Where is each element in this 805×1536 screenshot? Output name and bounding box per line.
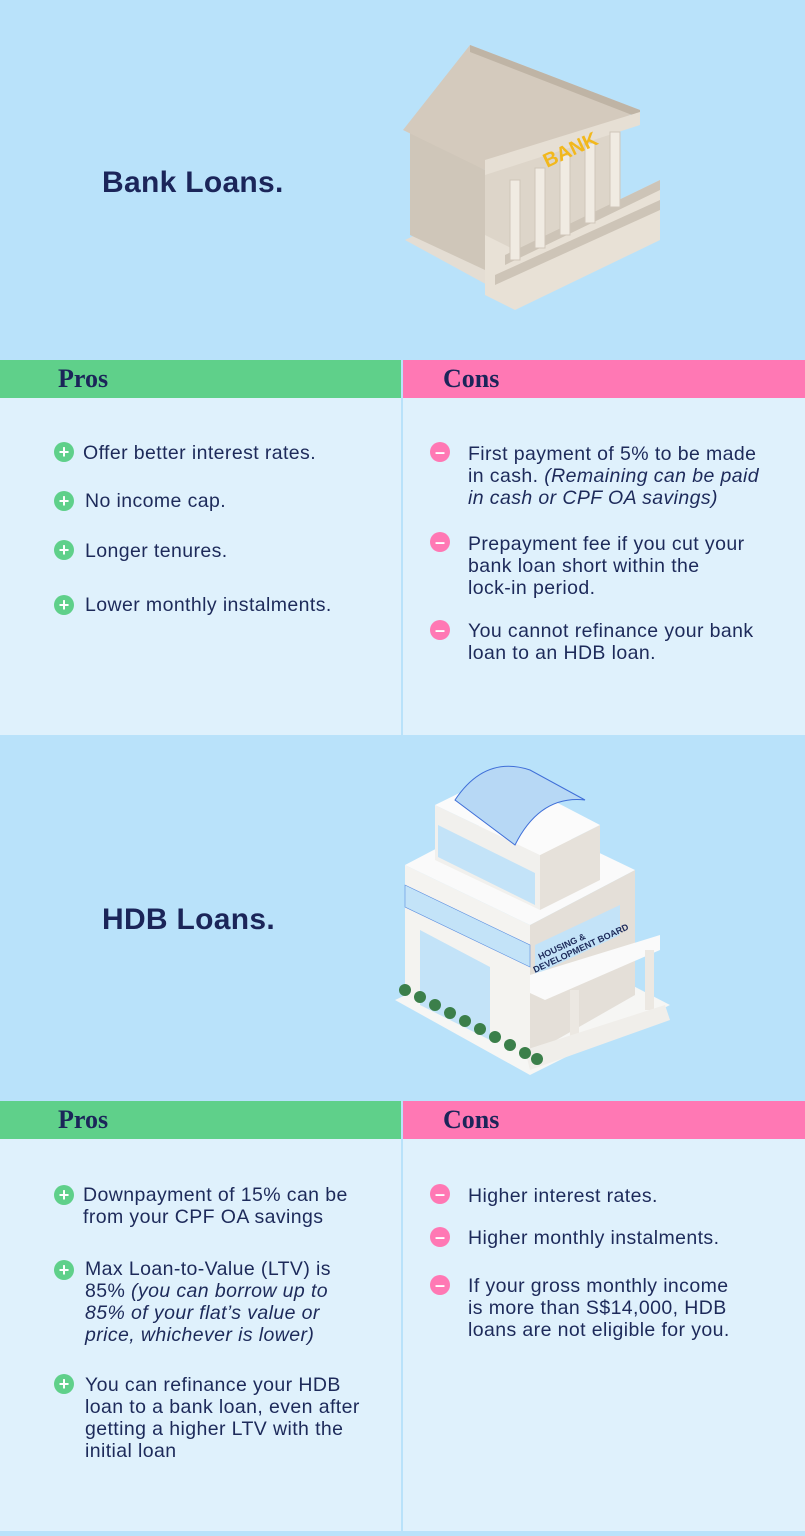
icon: bank building bbox=[403, 45, 660, 310]
panel: bank cons: First payment of 5% to be made bbox=[468, 443, 756, 465]
panel: bank cons: bank loan short within the bbox=[468, 555, 700, 577]
title: HDB Loans: HDB Loans. bbox=[102, 903, 275, 936]
panel: HDB cons: If your gross monthly income bbox=[468, 1275, 728, 1297]
panel: bank cons: in cash. (Remaining can be paid bbox=[468, 465, 759, 487]
panel: HDB pros bbox=[0, 1139, 401, 1531]
header bar: bank pros bbox=[0, 360, 401, 398]
icon: HDB building bbox=[395, 766, 670, 1075]
hero: bank loans bbox=[0, 0, 805, 360]
panel: bank pros: No income cap. bbox=[85, 490, 226, 512]
panel: bank pros: + bbox=[59, 442, 69, 462]
header bar: HDB pros bbox=[0, 1101, 401, 1139]
panel: bank cons: in cash or CPF OA savings) bbox=[468, 487, 718, 509]
panel: HDB pros: + bbox=[59, 1374, 69, 1394]
panel: HDB pros: + bbox=[59, 1260, 69, 1280]
panel: HDB pros: 85% of your flat’s value or bbox=[85, 1302, 320, 1324]
icon: bank building: BANK bbox=[540, 128, 602, 173]
panel: HDB pros: + bbox=[59, 1185, 69, 1205]
panel: HDB cons: – bbox=[435, 1275, 445, 1295]
icon: HDB building: HOUSING & bbox=[537, 931, 588, 962]
panel: HDB pros: initial loan bbox=[85, 1440, 177, 1462]
panel: bank cons: – bbox=[435, 442, 445, 462]
panel: HDB cons: is more than S$14,000, HDB bbox=[468, 1297, 727, 1319]
panel: HDB pros: from your CPF OA savings bbox=[83, 1206, 323, 1228]
title: Bank Loans: Bank Loans. bbox=[102, 166, 284, 199]
header bar: bank cons bbox=[403, 360, 805, 398]
panel: HDB pros: loan to a bank loan, even after bbox=[85, 1396, 360, 1418]
panel: bank pros bbox=[0, 398, 401, 735]
hero: HDB loans bbox=[0, 735, 805, 1101]
panel: HDB pros: 85% (you can borrow up to bbox=[85, 1280, 328, 1302]
panel: HDB pros: You can refinance your HDB bbox=[85, 1374, 341, 1396]
header bar: bank pros: Pros bbox=[58, 364, 108, 393]
panel: bank cons bbox=[403, 398, 805, 735]
header bar: HDB cons: Cons bbox=[443, 1105, 499, 1134]
panel: bank pros: + bbox=[59, 491, 69, 511]
panel: HDB cons: – bbox=[435, 1227, 445, 1247]
panel: HDB cons: Higher monthly instalments. bbox=[468, 1227, 719, 1249]
panel: bank pros: + bbox=[59, 540, 69, 560]
panel: bank cons: lock-in period. bbox=[468, 577, 595, 599]
panel: HDB cons: loans are not eligible for you. bbox=[468, 1319, 730, 1341]
panel: bank pros: + bbox=[59, 595, 69, 615]
panel: HDB cons bbox=[403, 1139, 805, 1531]
panel: HDB cons: – bbox=[435, 1184, 445, 1204]
icon: HDB building: DEVELOPMENT BOARD bbox=[532, 922, 631, 975]
panel: HDB pros: Max Loan-to-Value (LTV) is bbox=[85, 1258, 331, 1280]
panel: bank pros: Lower monthly instalments. bbox=[85, 594, 332, 616]
panel: HDB pros: price, whichever is lower) bbox=[85, 1324, 314, 1346]
panel: bank cons: – bbox=[435, 620, 445, 640]
panel: HDB cons: Higher interest rates. bbox=[468, 1185, 658, 1207]
panel: bank pros: Longer tenures. bbox=[85, 540, 228, 562]
panel: bank cons: loan to an HDB loan. bbox=[468, 642, 656, 664]
panel: HDB pros: Downpayment of 15% can be bbox=[83, 1184, 348, 1206]
panel: bank cons: You cannot refinance your bank bbox=[468, 620, 754, 642]
panel: bank pros: Offer better interest rates. bbox=[83, 442, 316, 464]
panel: HDB pros: getting a higher LTV with the bbox=[85, 1418, 343, 1440]
panel: bank cons: Prepayment fee if you cut your bbox=[468, 533, 744, 555]
panel: bank cons: – bbox=[435, 532, 445, 552]
header bar: HDB cons bbox=[403, 1101, 805, 1139]
header bar: HDB pros: Pros bbox=[58, 1105, 108, 1134]
header bar: bank cons: Cons bbox=[443, 364, 499, 393]
